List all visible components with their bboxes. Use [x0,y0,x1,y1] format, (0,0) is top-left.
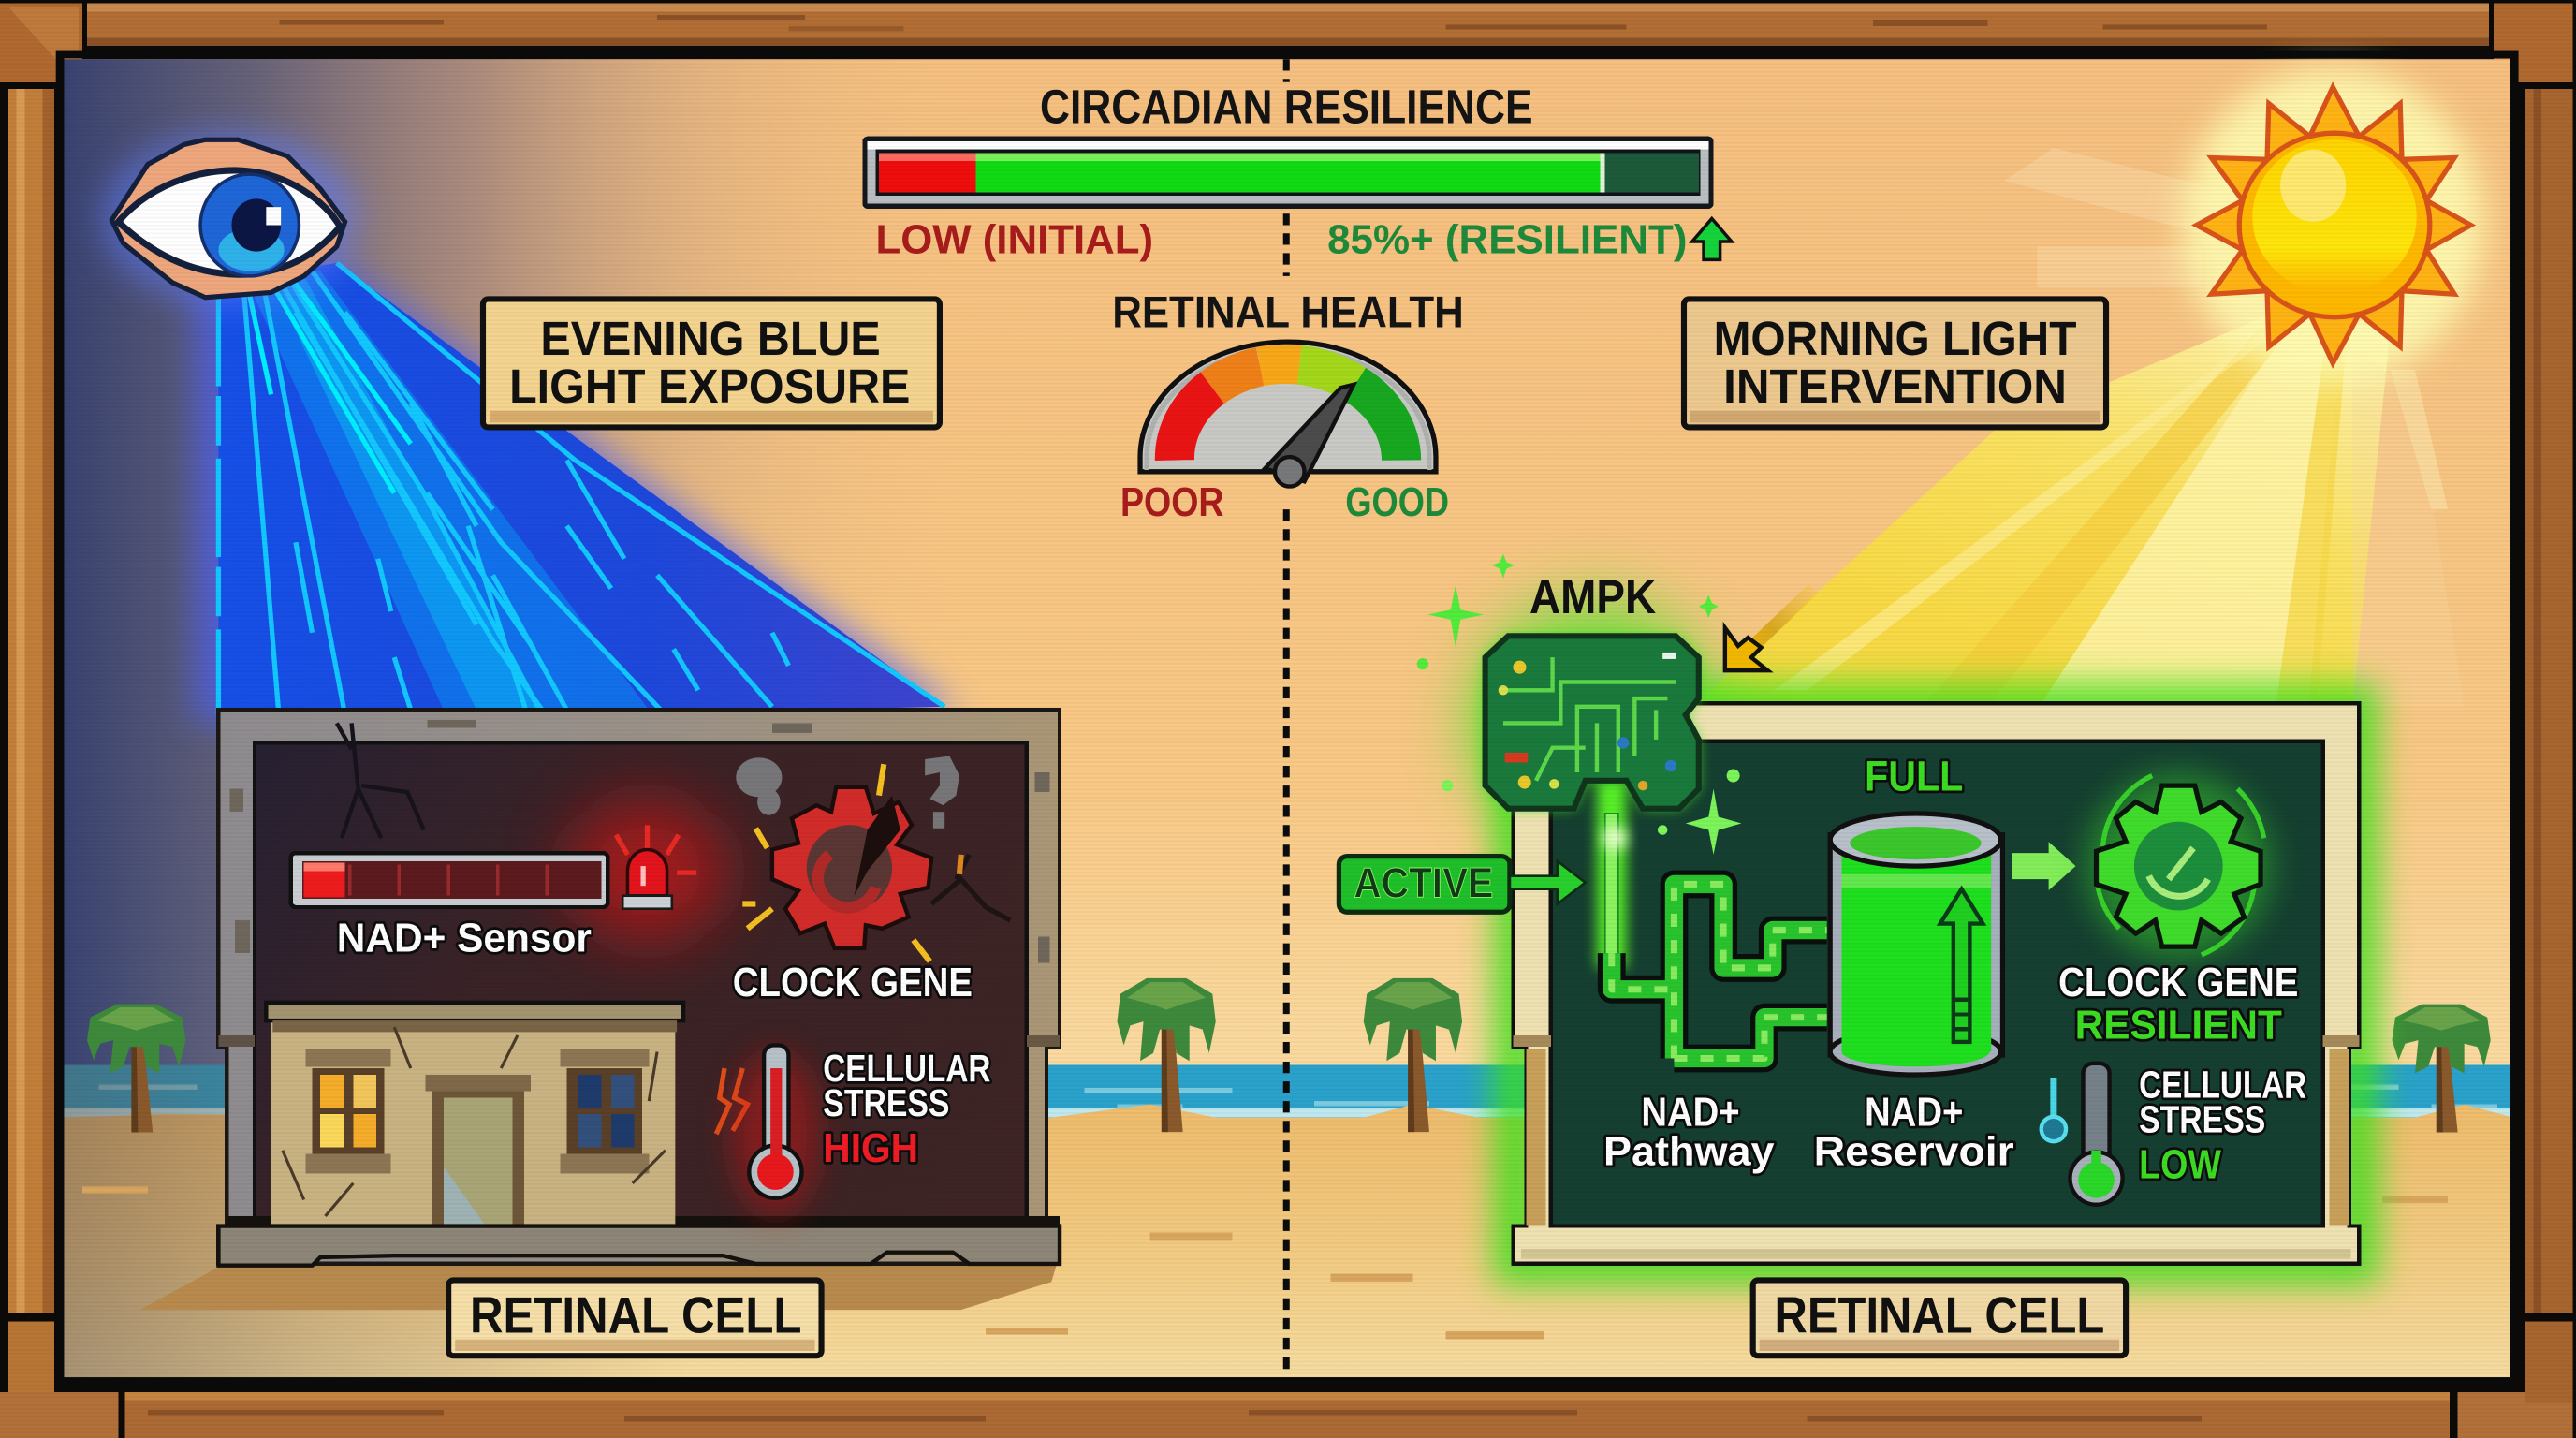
label: morning light intervention: MORNING LIGHT [1714,312,2076,365]
label: full: FULL [1865,752,1963,800]
label: cellular stress high: STRESS [823,1081,949,1124]
label: NAD+ sensor: NAD+ Sensor [337,915,592,961]
sparkles [1442,770,1741,855]
label: cellular stress low [2139,1064,2306,1188]
broken door [426,1075,531,1226]
palm trees [87,978,2491,1132]
active tag: ACTIVE [1354,858,1493,906]
blue light beam [194,263,961,723]
label: NAD+ reservoir [1814,1089,2014,1175]
label: retinal cell left [448,1280,822,1356]
label: NAD+ reservoir: NAD+ [1865,1089,1963,1135]
ground shadow: left cell [139,1266,1057,1310]
panel: resilient retinal cell [1442,598,2359,1264]
wall crack [337,723,424,838]
arrow: tank to gear [2011,838,2078,894]
sun [2182,67,2484,383]
AMPK circuit chip [1486,636,1699,809]
label: morning light intervention: INTERVENTION [1723,360,2067,413]
icon: up arrow [1692,218,1732,259]
icon: cold droplet thermometer [2042,1078,2066,1141]
bar label: low initial: LOW (INITIAL) [875,216,1153,262]
label: retinal cell right: RETINAL CELL [1775,1287,2104,1344]
label: cellular stress high: CELLULAR [823,1047,990,1090]
label: evening blue light exposure: LIGHT EXPOSURE [509,360,910,413]
heading: retinal health: RETINAL HEALTH [1112,287,1464,337]
label: morning light intervention [1684,299,2106,427]
green outer glow [1469,598,2356,1262]
label: evening blue light exposure [483,299,940,427]
red alarm glow [568,802,726,940]
NAD+ reservoir tank [1830,814,2002,1075]
icon: damaged clock gear [772,787,1010,948]
icon: resilient clock gear [2086,774,2271,958]
dark window [560,1049,649,1173]
icon: hot thermometer [733,1045,818,1216]
label: retinal cell left: RETINAL CELL [470,1287,801,1344]
cell stone frame [218,710,1060,1264]
lit window [305,1049,391,1173]
center dashed divider [1284,59,1288,1377]
sparkles around AMPK [1417,554,1719,669]
icon: smoke puffs [736,756,959,829]
gauge label: poor: POOR [1120,479,1224,525]
NAD+ pathway pipes [1612,884,1827,1058]
heading: AMPK: AMPK [1530,570,1656,624]
retinal health gauge [1140,342,1436,487]
icon: blue eye [102,133,359,304]
label: cellular stress high [823,1047,990,1171]
icon: sparks [742,764,961,961]
icon: stress flames [716,1068,748,1134]
gauge label: good: GOOD [1345,479,1449,525]
label: clock gene resilient: CLOCK GENE [2058,960,2298,1005]
arrow: light to AMPK [1725,588,1814,670]
label: retinal cell right [1753,1280,2126,1356]
label: NAD+ pathway: NAD+ [1641,1089,1740,1135]
label: evening blue light exposure: EVENING BLUE [540,312,881,365]
bar label: 85 percent resilient: 85%+ (RESILIENT) [1327,216,1687,262]
label: cellular stress low: STRESS [2139,1097,2265,1140]
label: cellular stress high: HIGH [823,1125,918,1171]
glowing pathway beam [1597,779,1627,977]
label: clock gene: CLOCK GENE [733,960,973,1005]
stone base slab [218,1226,1060,1266]
label: NAD+ pathway: Pathway [1603,1129,1775,1175]
label: clock gene resilient [2058,960,2298,1048]
morning sun rays [1692,148,2465,723]
sand ripples [82,1186,2448,1340]
label: NAD+ pathway [1603,1089,1775,1175]
arrow: active to pathway [1510,861,1586,903]
label: clock gene resilient: RESILIENT [2075,1002,2282,1048]
icon: cool thermometer [2070,1064,2123,1205]
damaged house [266,1003,683,1226]
heading: circadian resilience: CIRCADIAN RESILIENCE [1040,81,1533,134]
cell cream frame [1513,703,2359,1264]
label: NAD+ reservoir: Reservoir [1814,1129,2014,1175]
label: cellular stress low: LOW [2139,1142,2221,1188]
panel: stressed retinal cell [218,710,1060,1266]
NAD+ sensor bar [291,853,607,907]
icon: red alarm [616,825,696,909]
label: cellular stress low: CELLULAR [2139,1064,2306,1107]
circadian resilience progress bar [862,137,1714,209]
